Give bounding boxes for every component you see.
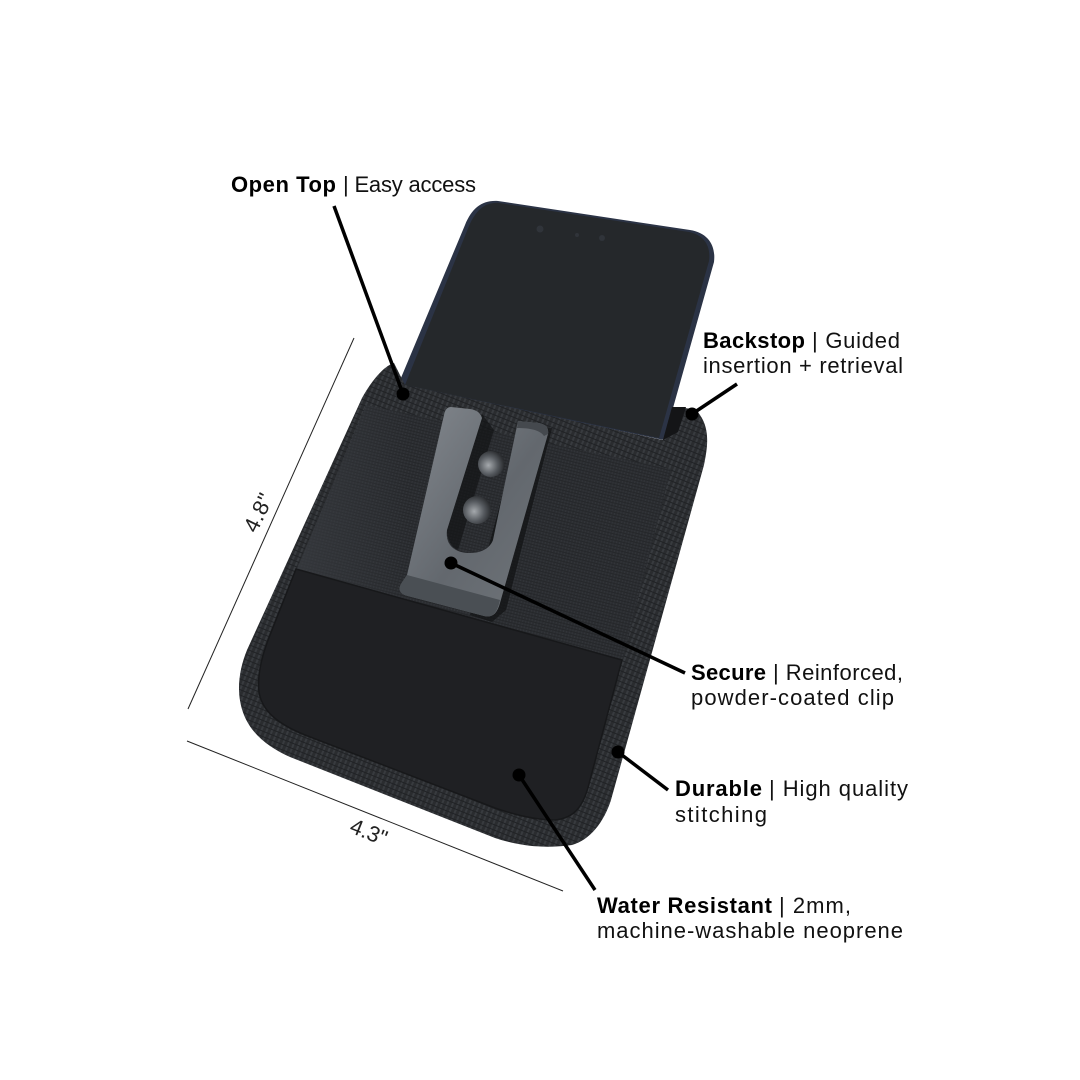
dimension: height: 4.8" bbox=[238, 489, 278, 536]
callout: open top bbox=[231, 172, 476, 197]
callout: open top: Open Top bbox=[231, 172, 336, 197]
pouch stitched binding bbox=[239, 363, 707, 847]
rivet upper bbox=[478, 451, 504, 477]
neoprene panel bbox=[259, 569, 622, 820]
pouch bbox=[239, 363, 707, 847]
callout: water resistant: Water Resistant bbox=[597, 893, 773, 918]
dimension: width bbox=[187, 741, 563, 891]
callout: durable bbox=[675, 776, 908, 827]
callout: secure: Secure bbox=[691, 660, 766, 685]
webbing band bbox=[296, 405, 671, 662]
callout: open top: | Easy access bbox=[343, 172, 476, 197]
leader line: water resistant bbox=[512, 768, 595, 890]
callout: water resistant: machine-washable neoprene bbox=[597, 918, 903, 943]
leader line: secure bbox=[444, 556, 685, 673]
callout: water resistant bbox=[597, 893, 903, 943]
phone screen bbox=[405, 203, 709, 438]
callout: backstop: | Guided bbox=[812, 328, 900, 353]
clip upper arm shading bbox=[517, 421, 548, 436]
leader line: open top bbox=[334, 206, 410, 400]
leader line: durable bbox=[612, 746, 668, 790]
dimension: width: 4.3" bbox=[347, 813, 391, 851]
callout: secure: powder-coated clip bbox=[691, 685, 894, 710]
clip shadow bbox=[470, 428, 552, 622]
gap behind backstop bbox=[663, 407, 686, 440]
callout: backstop: Backstop bbox=[703, 328, 805, 353]
callout: secure: | Reinforced, bbox=[773, 660, 903, 685]
callout: backstop: insertion + retrieval bbox=[703, 353, 903, 378]
clip folded lip bbox=[400, 575, 500, 616]
callout: durable: stitching bbox=[675, 802, 767, 827]
callout: durable: | High quality bbox=[769, 776, 908, 801]
phone camera dots bbox=[536, 226, 605, 241]
icon: smartphone bbox=[398, 201, 714, 440]
callout: secure bbox=[691, 660, 903, 710]
phone body bbox=[398, 201, 714, 440]
clip body bbox=[400, 407, 548, 616]
webbing highlight bbox=[296, 405, 671, 662]
callout: backstop bbox=[703, 328, 903, 378]
belt clip bbox=[400, 407, 552, 622]
slot shadow bbox=[447, 414, 494, 550]
rivet lower bbox=[463, 496, 491, 524]
callout: durable: Durable bbox=[675, 776, 762, 801]
callout: water resistant: | 2mm, bbox=[779, 893, 851, 918]
leader line: backstop bbox=[686, 384, 737, 420]
dimension: height bbox=[188, 338, 354, 709]
